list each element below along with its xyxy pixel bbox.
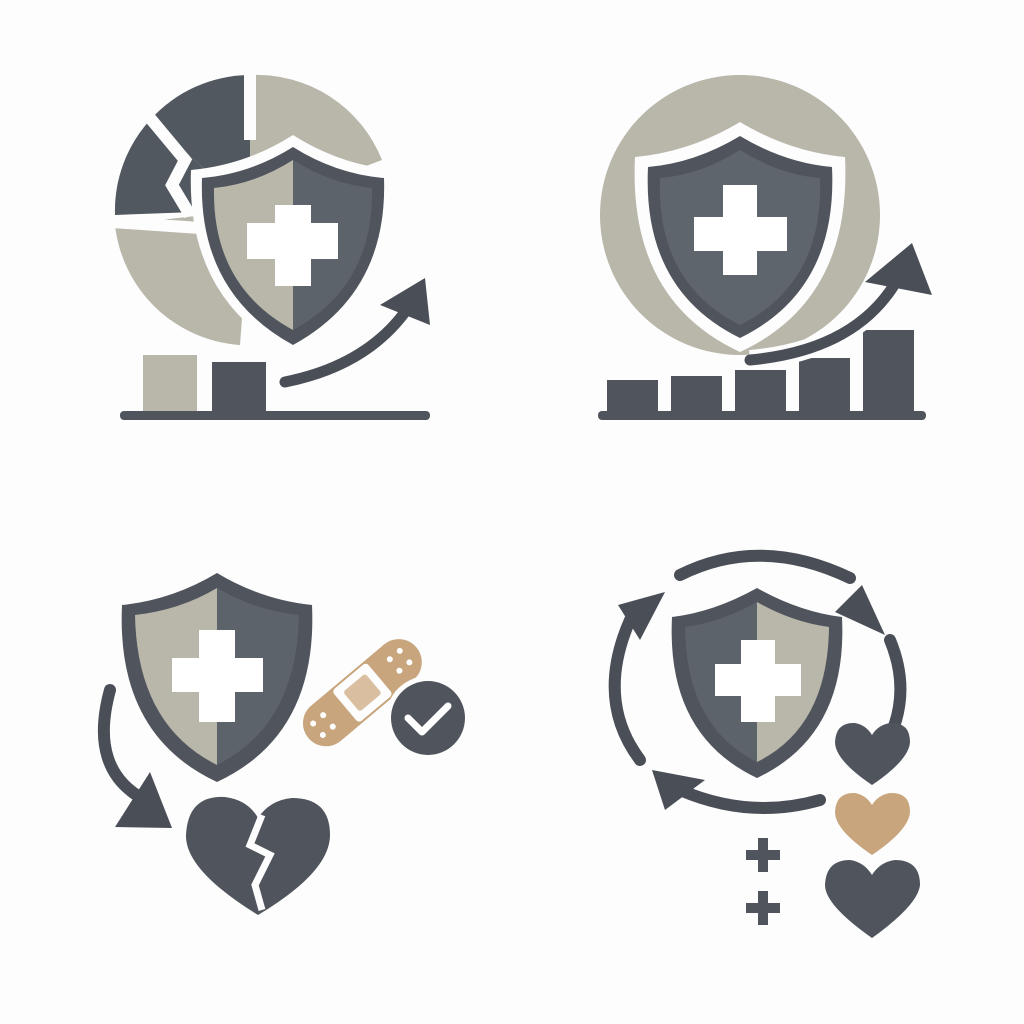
shield dark — [635, 122, 845, 352]
hearts — [825, 723, 920, 938]
panel: top-right steady growth — [598, 75, 932, 420]
shield two-tone — [672, 588, 842, 778]
bars — [120, 355, 430, 420]
check circle — [386, 676, 470, 760]
panel: top-left coverage growth — [112, 72, 430, 420]
curved arrow down — [104, 690, 172, 828]
arrow up — [750, 243, 932, 360]
plus signs — [746, 838, 780, 925]
pie circle — [112, 72, 382, 345]
arrow up — [285, 278, 430, 382]
panel: bottom-left recovery — [104, 573, 470, 915]
bars — [598, 330, 926, 420]
beige circle — [600, 75, 880, 355]
panel: bottom-right continuous care — [615, 556, 920, 938]
shield two-tone — [122, 573, 312, 782]
circular arrows — [615, 556, 900, 810]
broken heart — [186, 797, 330, 915]
bandage — [291, 627, 434, 758]
shield two-tone — [191, 135, 395, 355]
